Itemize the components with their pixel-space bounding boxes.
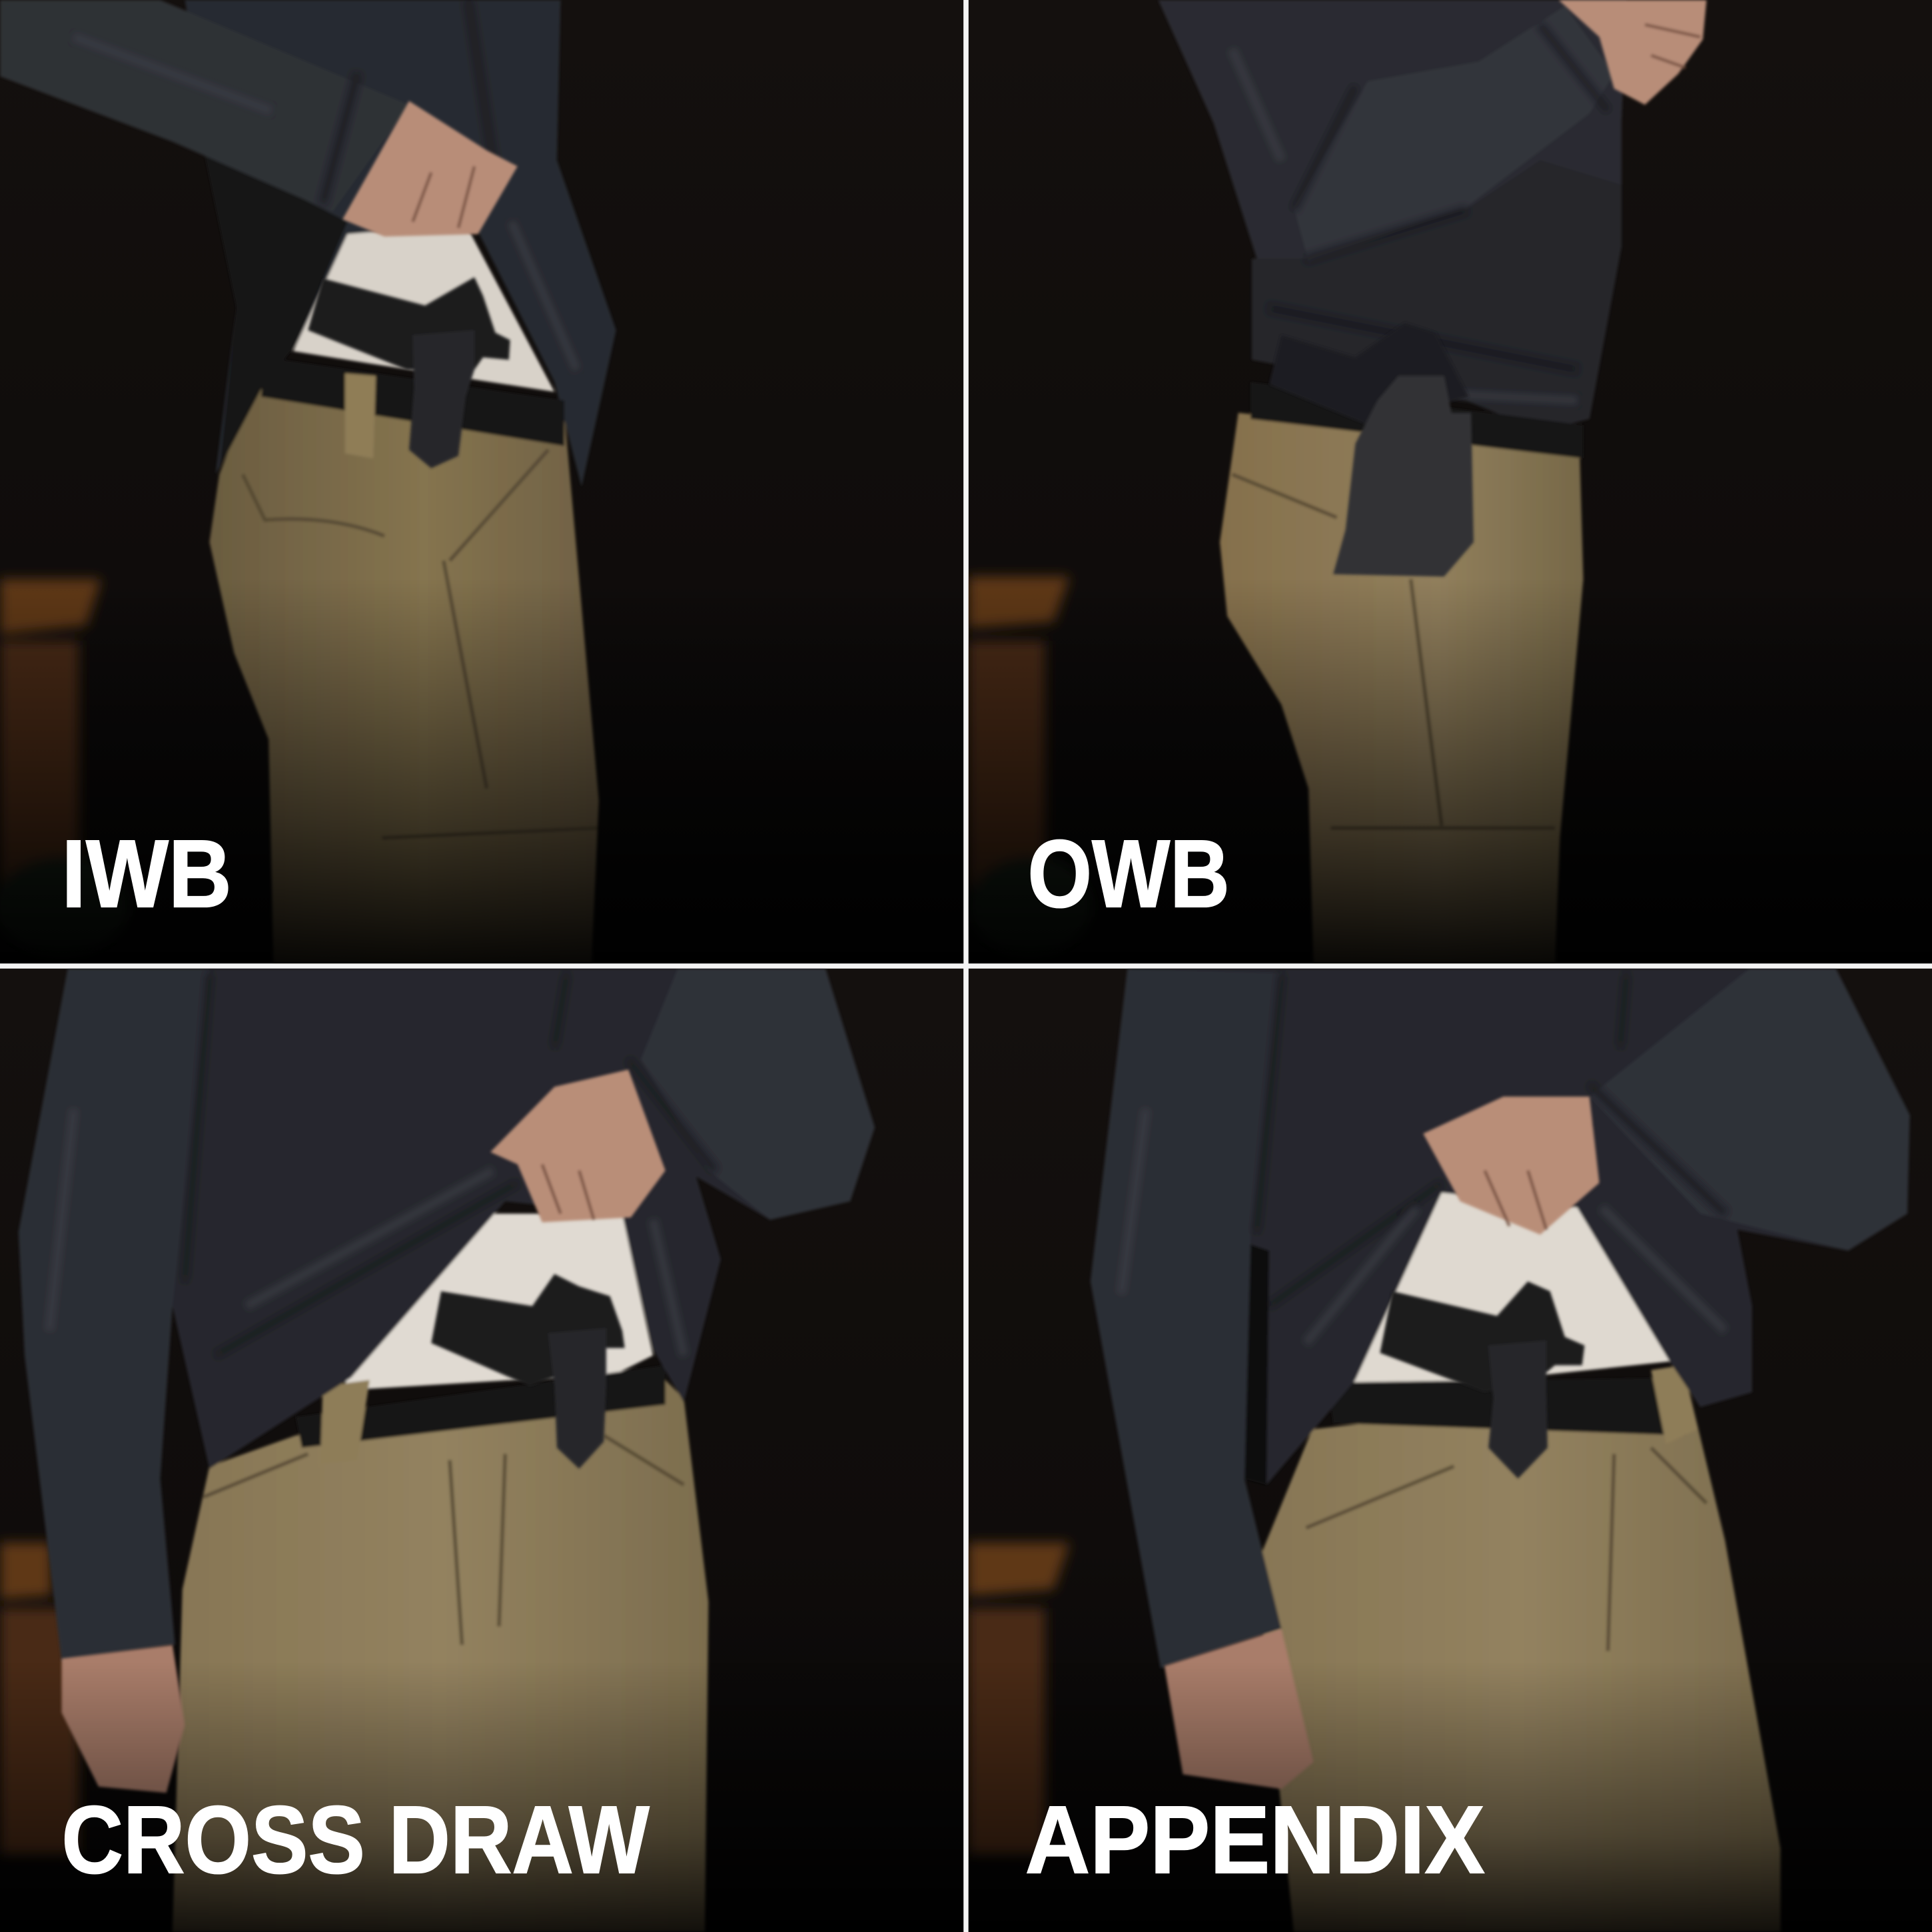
panel: Appendix <box>969 969 1932 1932</box>
panel: Cross Draw <box>0 969 963 1932</box>
background table <box>0 1543 79 1854</box>
figure: torso and pants <box>19 969 875 1932</box>
figure: torso and pants <box>1091 969 1910 1932</box>
icon: pistol and holster <box>1269 323 1474 577</box>
icon: pistol and clip <box>431 1274 625 1469</box>
label: Cross Draw: CROSS DRAW <box>61 1785 650 1893</box>
panel: IWB <box>0 0 963 963</box>
label: IWB: IWB <box>61 819 232 927</box>
background table <box>0 572 105 882</box>
label: OWB: OWB <box>1027 819 1230 927</box>
hands <box>61 1069 666 1793</box>
hands <box>1559 0 1707 105</box>
label: Appendix: APPENDIX <box>1025 1785 1485 1893</box>
panel: OWB <box>969 0 1932 963</box>
icon: pistol and clip <box>1380 1281 1584 1478</box>
figure: torso and pants <box>1159 0 1626 963</box>
background table <box>969 1543 1069 1854</box>
hands <box>1165 1097 1600 1789</box>
background table <box>969 569 1074 929</box>
hand lifting shirt <box>342 101 518 237</box>
figure: torso and pants <box>0 0 616 963</box>
icon: pistol and clip <box>308 277 510 468</box>
